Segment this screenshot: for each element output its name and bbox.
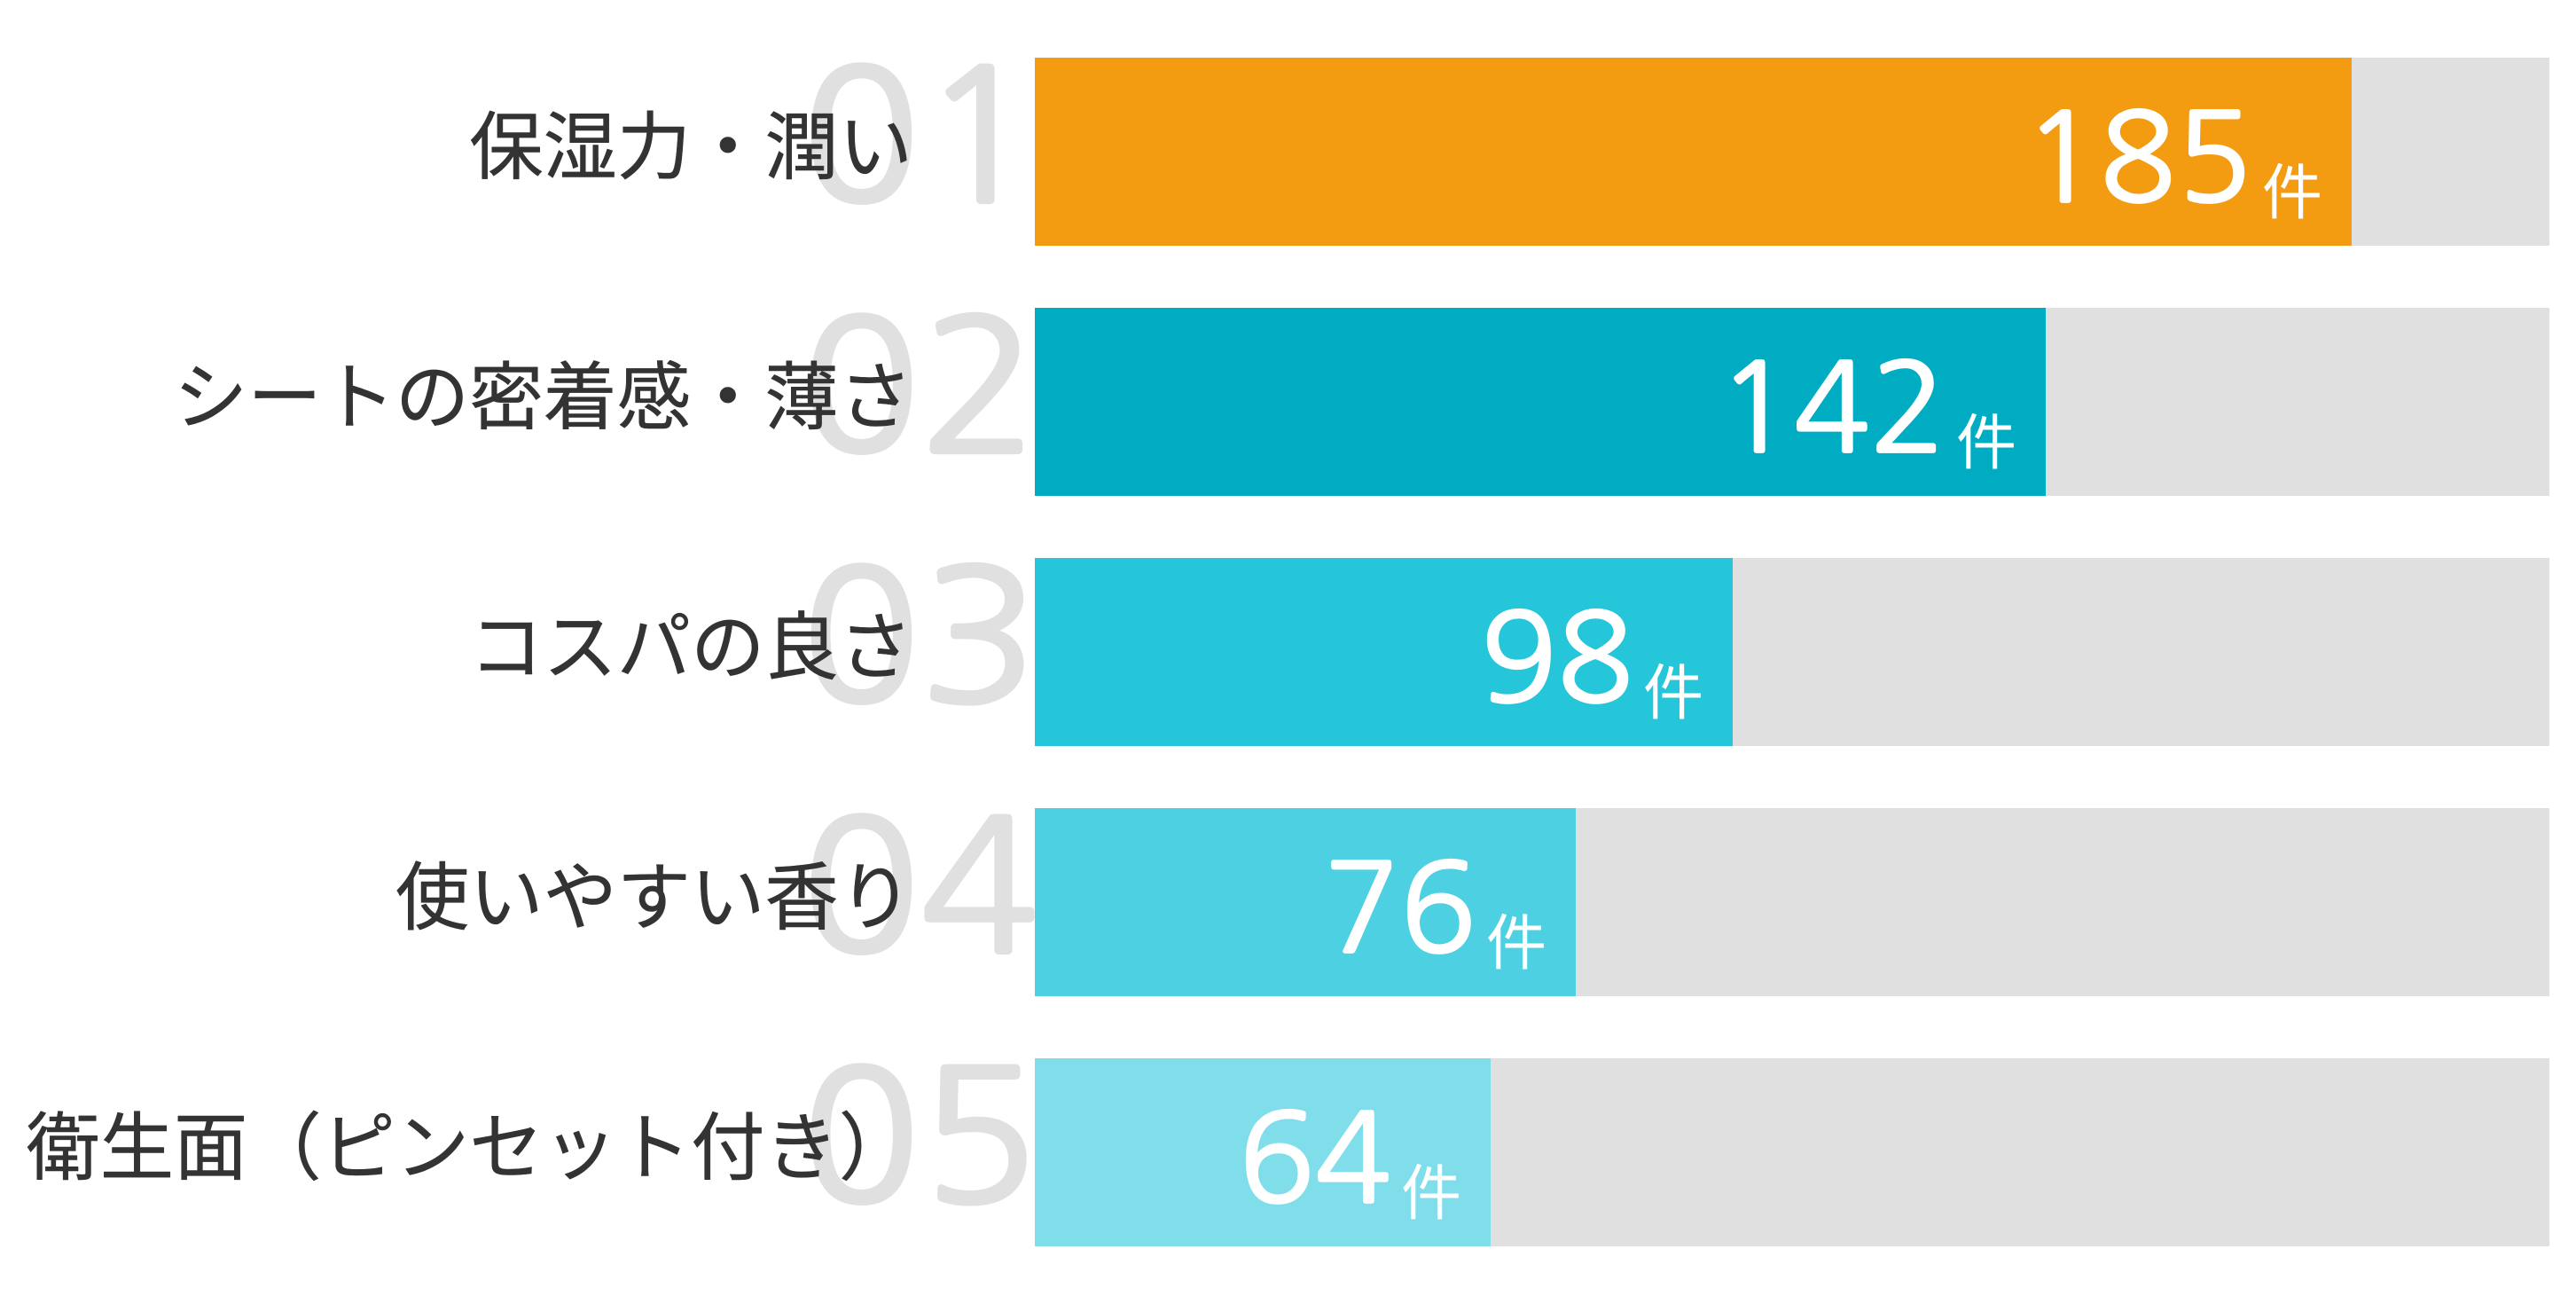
count: 76 [1324, 848, 1476, 970]
unit: 件 [2262, 144, 2322, 232]
rank number 04: 04 [802, 795, 1038, 978]
count: 142 [1718, 348, 1946, 470]
bar track [1035, 58, 2549, 246]
row 1: 保湿力・潤い [469, 44, 2549, 246]
row 3: コスパの良さ [469, 545, 2549, 746]
count: 98 [1481, 598, 1633, 720]
bar track [1035, 808, 2549, 996]
bar value 76件 [1035, 808, 1576, 996]
row 4: 使いやすい香り [395, 795, 2549, 996]
bar track [1035, 558, 2549, 746]
bar value 98件 [1035, 558, 1733, 746]
label: 衛生面（ピンセット付き） [26, 1107, 912, 1190]
bar value 185件 [1035, 58, 2352, 246]
bar track [1035, 1058, 2549, 1246]
label: 使いやすい香り [395, 857, 912, 939]
rank number 03: 03 [802, 545, 1038, 728]
row 5: 衛生面（ピンセット付き） [26, 1045, 2549, 1246]
bar track [1035, 308, 2549, 496]
label: シートの密着感・薄さ [174, 357, 912, 439]
label: 保湿力・潤い [469, 106, 912, 189]
rank number 05: 05 [802, 1045, 1038, 1229]
unit: 件 [1401, 1144, 1461, 1232]
unit: 件 [1643, 644, 1703, 732]
count: 185 [2024, 98, 2252, 220]
unit: 件 [1956, 394, 2016, 482]
count: 64 [1239, 1098, 1391, 1221]
bar value 142件 [1035, 308, 2046, 496]
row 2: シートの密着感・薄さ [174, 295, 2549, 496]
unit: 件 [1486, 894, 1546, 982]
rank number 01: 01 [802, 44, 1038, 228]
label: コスパの良さ [469, 607, 912, 689]
bar value 64件 [1035, 1058, 1491, 1246]
rank number 02: 02 [802, 295, 1038, 478]
